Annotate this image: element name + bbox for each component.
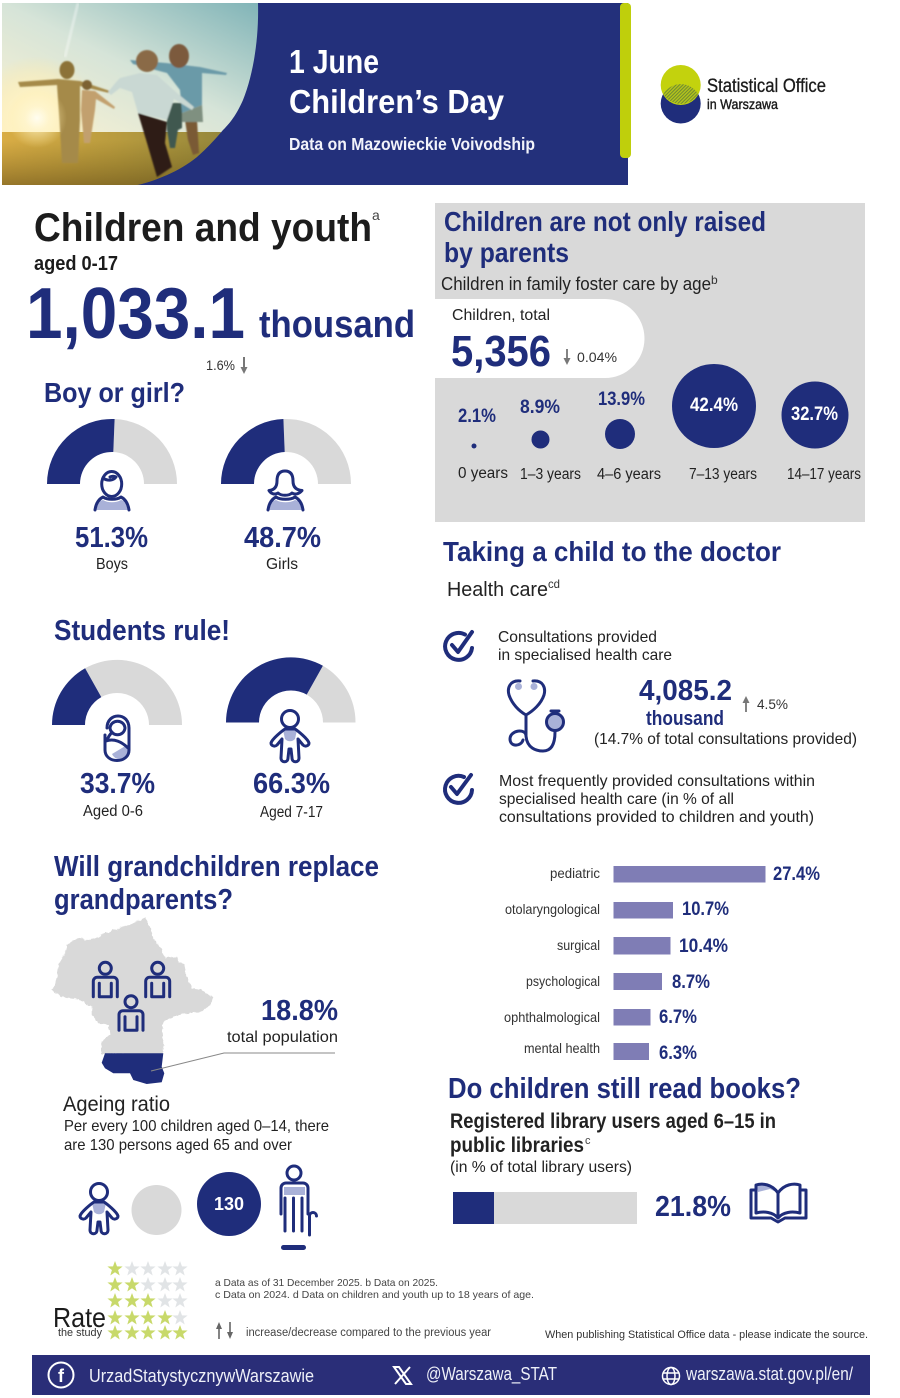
icon: elderly person (281, 1166, 316, 1250)
bar: ophthalmological: ophthalmological (504, 1009, 600, 1025)
bubble: 1-3 years: 8.9% (520, 397, 560, 418)
subheading: aged 0-17 (34, 253, 118, 275)
section: do children still read books (448, 1073, 806, 1224)
icon: facebook (48, 1362, 74, 1388)
change indicator (742, 696, 788, 712)
gauge: girls (221, 419, 351, 484)
label: aged 7-17: Aged 7-17 (260, 804, 323, 821)
bubble: 0 years (458, 406, 508, 482)
X handle: @Warszawa_STAT (426, 1364, 557, 1385)
bar: otolaryngological: 10.7% (682, 899, 729, 920)
subheading: cd (548, 577, 560, 591)
bar chart: consultation types (504, 864, 820, 1064)
consultations text: in specialised health care (498, 647, 672, 664)
heading: Boy or girl? (44, 377, 185, 408)
heading: Taking a child to the doctor (443, 536, 781, 567)
ageing ratio heading: Ageing ratio (63, 1093, 170, 1116)
footnotes: a Data as of 31 December 2025. b Data on 2025. (215, 1277, 438, 1289)
heading: Do children still read books? (448, 1073, 801, 1105)
icon: check mark (445, 775, 472, 803)
most frequent consultations text: consultations provided to children and youth) (499, 809, 814, 826)
subheading: Registered library users aged 6–15 in (450, 1110, 776, 1133)
progress bar: 21.8% (453, 1192, 637, 1224)
bar: pediatric: pediatric (550, 865, 600, 881)
bubble: 7-13 years (672, 364, 757, 483)
bar: otolaryngological: otolaryngological (505, 901, 600, 917)
banner subtitle: Data on Mazowieckie Voivodship (289, 134, 535, 154)
bubble: 0 years: 2.1% (458, 406, 496, 427)
bar: pediatric: 27.4% (773, 864, 820, 885)
heading: Students rule! (54, 615, 230, 647)
icon: child (271, 710, 309, 762)
gauge: aged 7-17 (226, 657, 356, 722)
section: students rule (52, 615, 356, 821)
change indicator: 1.6% (206, 357, 235, 373)
consultations text: Consultations provided (498, 629, 657, 646)
value: girls: 48.7% (244, 522, 321, 554)
icon: person 3 (119, 996, 143, 1030)
subheading: b (711, 273, 718, 287)
bar: otolaryngological (505, 899, 729, 920)
section: boy or girl (44, 377, 351, 573)
headline number: thousand (259, 304, 415, 346)
subheading: public libraries (450, 1134, 584, 1157)
bar: psychological: 8.7% (672, 972, 710, 993)
panel: family foster care (435, 203, 865, 522)
rate label: Rate (53, 1302, 106, 1333)
label: aged 0-6: Aged 0-6 (83, 803, 143, 820)
icon: swaddled baby (105, 716, 129, 760)
photo: children running in a field (0, 3, 262, 187)
icon: check mark (445, 632, 472, 660)
most frequent consultations text: specialised health care (in % of all (499, 791, 734, 808)
bar: mental health: 6.3% (659, 1043, 697, 1064)
heading: Will grandchildren replace (54, 851, 379, 883)
total callout: 0.04% (577, 349, 617, 365)
footnotes: c Data on 2024. d Data on children and youth up to 18 years of age. (215, 1289, 534, 1301)
bubble: 7-13 years: 42.4% (690, 395, 738, 416)
star rating (107, 1261, 188, 1340)
logo: Statistical Office in Warszawa: Statistical Office (707, 76, 826, 97)
bar: mental health (524, 1040, 697, 1064)
gauge: aged 0-6 (52, 660, 182, 725)
rate the study (53, 1261, 188, 1340)
value: 21.8% (655, 1191, 731, 1223)
bubble: 14-17 years (782, 382, 861, 483)
circle: children 100 (132, 1185, 182, 1235)
accent bar (620, 3, 631, 158)
section: children and youth (26, 206, 415, 374)
note: share of total consultations: (14.7% of total consultations provided) (594, 731, 857, 748)
icon: child (80, 1184, 118, 1234)
bar: ophthalmological: 6.7% (659, 1007, 697, 1028)
icon: increase and decrease arrows (216, 1322, 233, 1339)
most frequent consultations text (499, 773, 815, 826)
heading: Children are not only raised (444, 206, 766, 237)
value: consultations: thousand (646, 708, 724, 730)
bar: surgical: 10.4% (679, 936, 728, 957)
icon: open book (751, 1184, 806, 1222)
most frequent consultations text: Most frequently provided consultations within (499, 773, 815, 790)
bubble: 0 years: 0 years (458, 465, 508, 482)
change indicator: 4.5% (757, 696, 788, 712)
heading (444, 206, 766, 268)
subheading: c (585, 1135, 591, 1147)
heading: a (372, 207, 380, 223)
ageing ratio description (64, 1118, 329, 1154)
value: consultations: 4,085.2 (639, 675, 732, 707)
website: warszawa.stat.gov.pl/en/ (685, 1364, 853, 1384)
heading: grandparents? (54, 884, 233, 916)
section: will grandchildren replace grandparents (52, 851, 379, 1250)
subheading: Children in family foster care by age (441, 274, 711, 294)
value: aged 7-17: 66.3% (253, 768, 330, 800)
value: boys: 51.3% (75, 522, 148, 554)
map: Mazowieckie voivodship (52, 917, 213, 1084)
total callout (435, 299, 644, 378)
headline number (26, 274, 415, 354)
icon: girl (268, 471, 303, 510)
logo: Statistical Office in Warszawa: in Warszawa (707, 96, 778, 112)
bubble: 4-6 years (597, 389, 661, 483)
bar: surgical: surgical (557, 937, 600, 953)
footer bar (32, 1355, 870, 1395)
value: aged 0-6: 33.7% (80, 768, 155, 800)
bar: psychological: psychological (526, 973, 600, 989)
total callout: Children, total (452, 307, 550, 324)
value: 18.8%: 18.8% (261, 995, 338, 1027)
source note: When publishing Statistical Office data - please indicate the source. (545, 1329, 868, 1341)
header banner (0, 3, 631, 187)
icon: facebook: f (58, 1366, 65, 1386)
banner title: Children’s Day (289, 83, 505, 120)
facebook handle: UrzadStatystycznywWarszawie (89, 1366, 314, 1386)
bar: pediatric (550, 864, 820, 885)
bubble: 4-6 years: 4–6 years (597, 466, 661, 483)
footnotes (215, 1277, 534, 1301)
headline number: 1,033.1 (26, 274, 245, 354)
label: boys: Boys (96, 556, 128, 573)
bubble: 7-13 years: 7–13 years (689, 466, 757, 483)
bubble: 14-17 years: 32.7% (791, 404, 838, 425)
bar: surgical (557, 936, 728, 957)
circle: seniors 130 (197, 1172, 261, 1236)
label: total population: total population (227, 1029, 338, 1046)
heading (54, 851, 379, 916)
the study label: the study (58, 1327, 102, 1339)
circle: seniors 130: 130 (214, 1194, 244, 1214)
icon: globe (662, 1368, 680, 1384)
heading: Children and youth (34, 206, 372, 250)
label: girls: Girls (266, 556, 298, 573)
bubble: 1-3 years: 1–3 years (520, 466, 581, 483)
bar: psychological (526, 972, 710, 993)
bubble: 1-3 years (520, 397, 581, 483)
bar: ophthalmological (504, 1007, 697, 1028)
total callout: 5,356 (451, 327, 551, 376)
icon: X (394, 1367, 411, 1384)
ageing ratio description: are 130 persons aged 65 and over (64, 1137, 293, 1154)
banner title: 1 June (289, 43, 379, 80)
bar: mental health: mental health (524, 1040, 600, 1056)
ageing ratio description: Per every 100 children aged 0–14, there (64, 1118, 329, 1135)
section: taking a child to the doctor (443, 536, 857, 1064)
banner background (2, 3, 628, 185)
heading: by parents (444, 237, 569, 268)
legend: arrows: increase/decrease compared to the previous year (246, 1327, 491, 1339)
note: (in % of total library users) (450, 1159, 632, 1176)
callout line (151, 1053, 335, 1071)
bubble: 14-17 years: 14–17 years (787, 466, 861, 483)
consultations text (498, 629, 672, 664)
panel background (435, 203, 865, 522)
icon: stethoscope (508, 681, 564, 751)
bubble: 4-6 years: 13.9% (598, 389, 645, 410)
banner title (289, 43, 505, 120)
footer background (32, 1355, 870, 1395)
icon: boy (95, 472, 129, 510)
subheading (450, 1110, 776, 1157)
gauge: boys (47, 419, 177, 484)
icon: person 2 (146, 962, 170, 997)
subheading: Health care (447, 579, 548, 601)
logo: Statistical Office in Warszawa (661, 65, 826, 124)
value: consultations (639, 675, 732, 730)
icon: person 1 (93, 962, 117, 997)
